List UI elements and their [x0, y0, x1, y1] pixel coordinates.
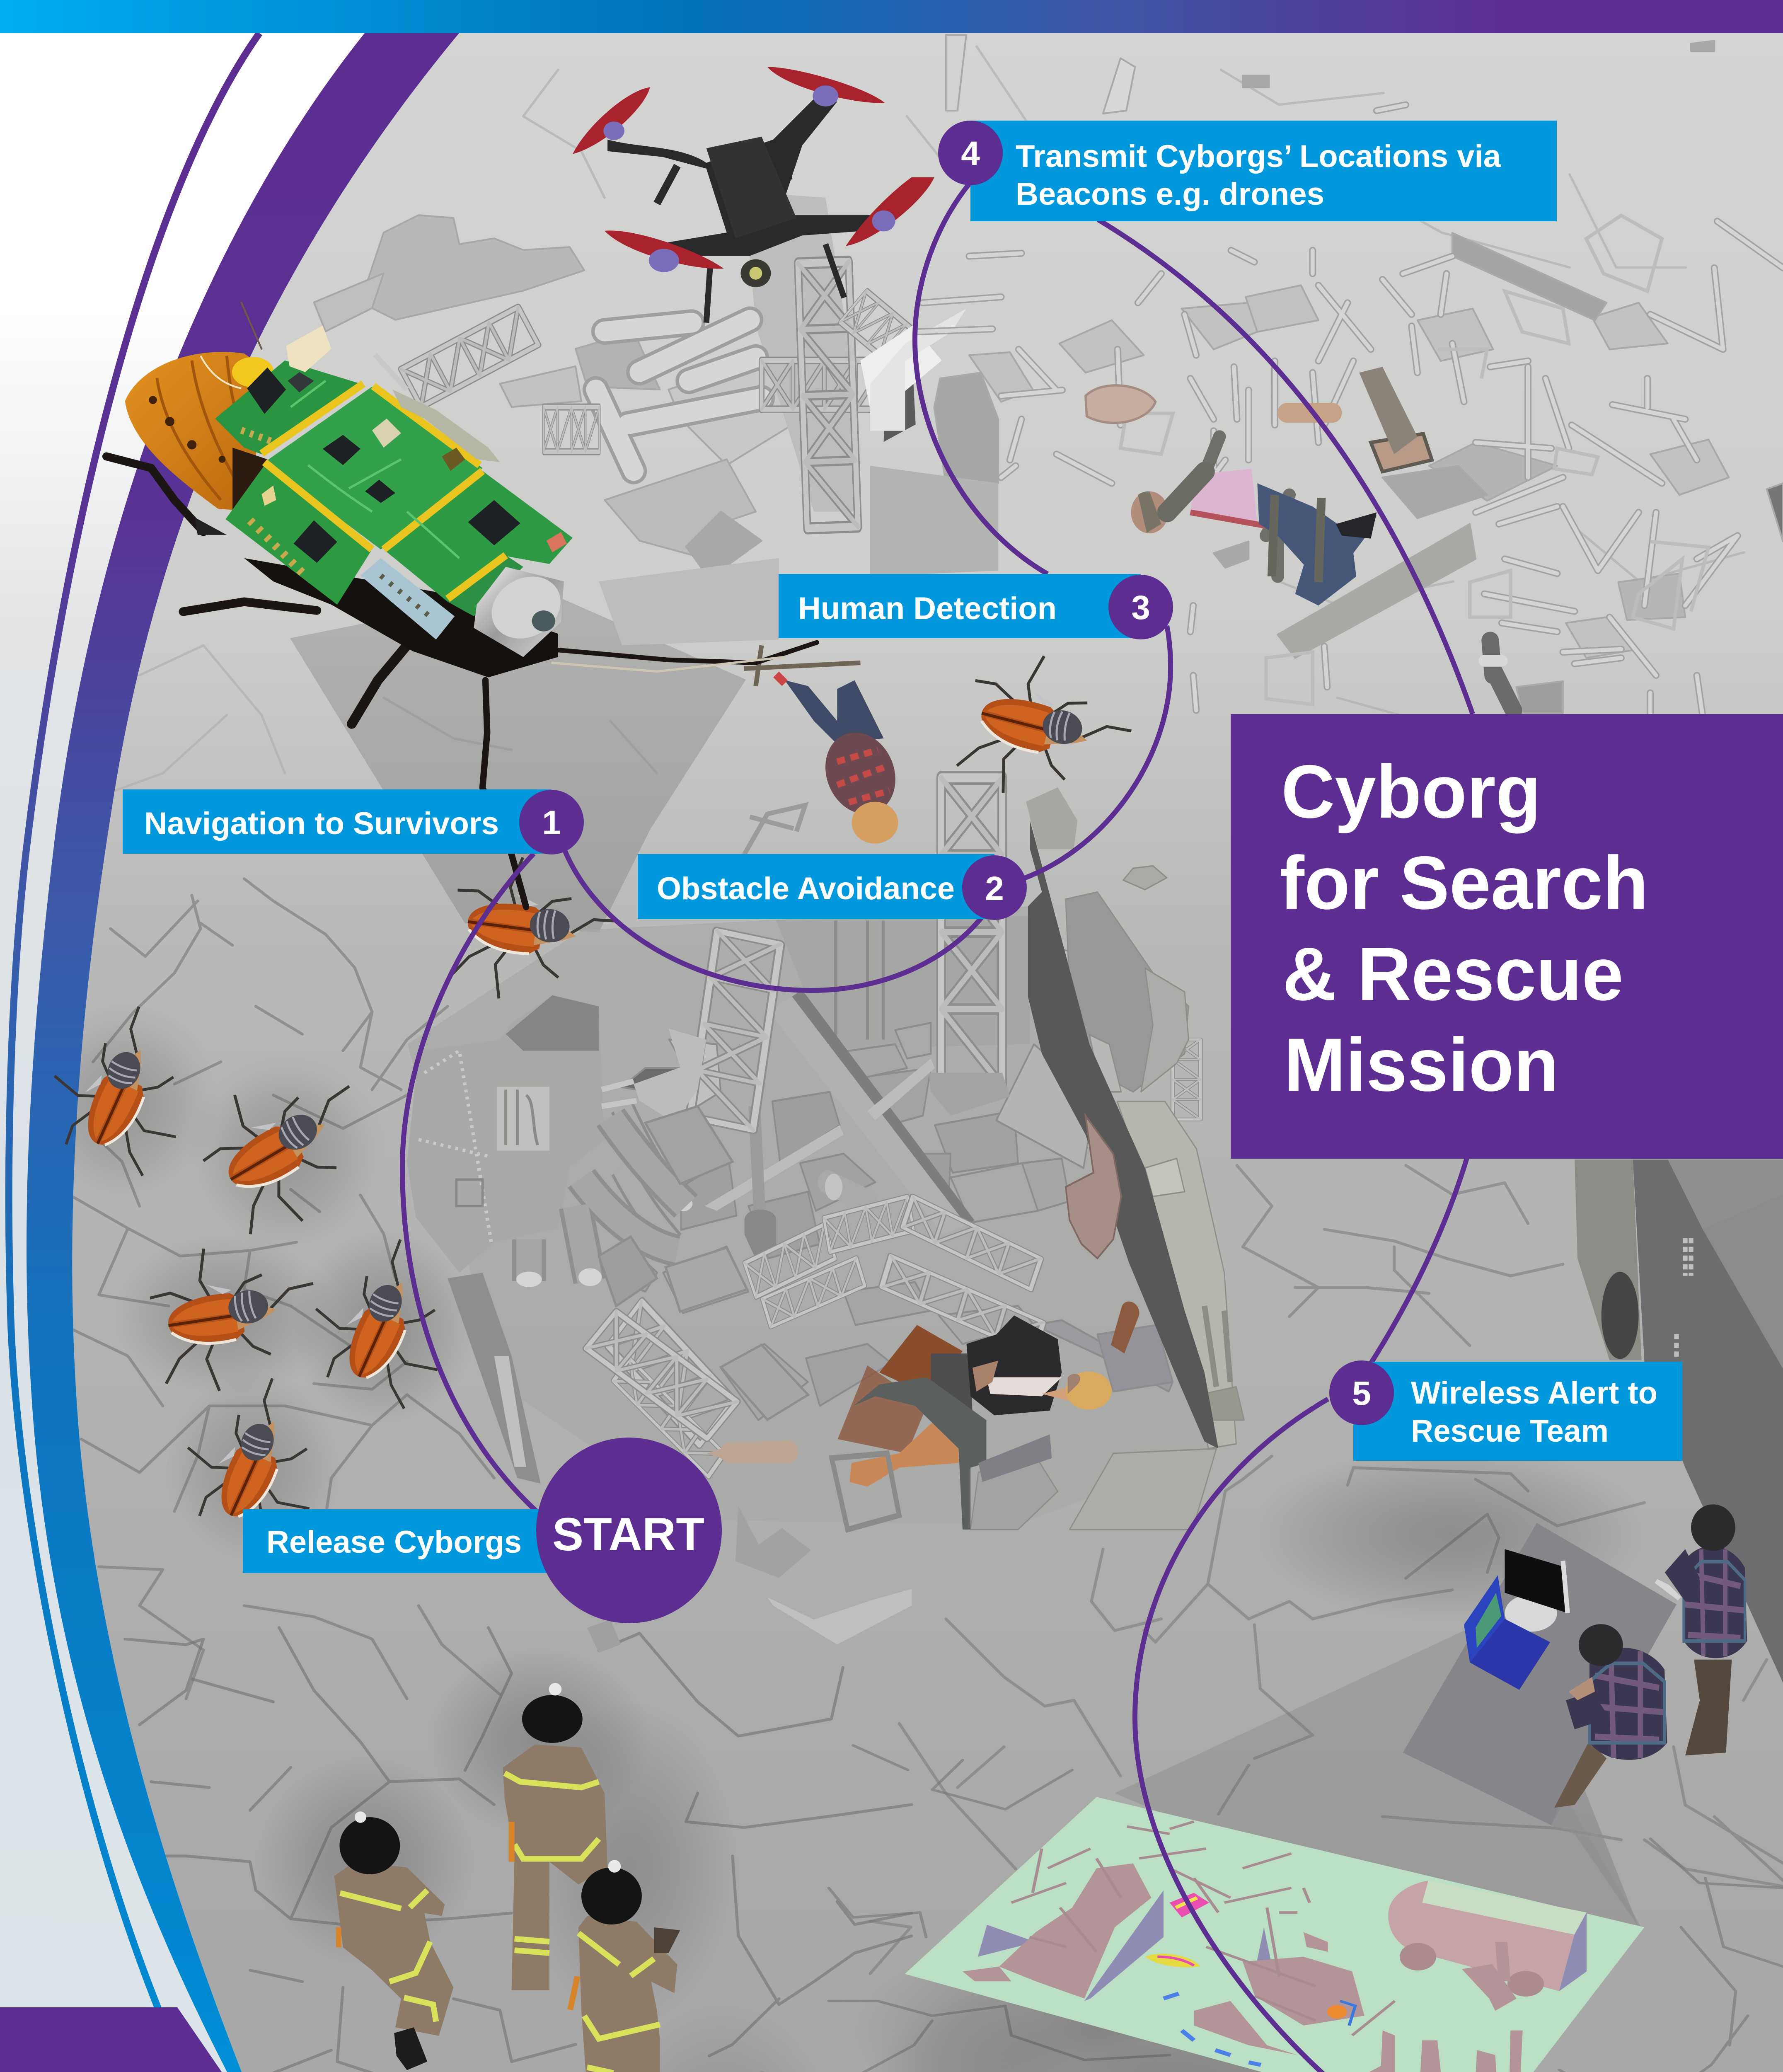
heap: pad: [407, 906, 1217, 1525]
cyborg insect 7: [949, 641, 1144, 821]
debris: sticks: [917, 105, 1783, 716]
insect: orange abdomen: [125, 352, 279, 512]
step: Release Cyborgs: Release Cyborgs: [266, 1525, 522, 1560]
cracks: left field: [70, 879, 500, 1699]
cyborg insect 4: [292, 1220, 481, 1418]
title panel: Mission: [1284, 1022, 1559, 1107]
cracks: lower left field: [122, 1628, 912, 2072]
scene: mobile unit truck: [1575, 1159, 1783, 1683]
mission path: Navigation to Obstacle Avoidance: [564, 850, 986, 990]
step 5: Wireless Alert to Rescue Team: [1329, 1360, 1682, 1461]
step: Release Cyborgs: START: [552, 1508, 704, 1560]
rubble: pipes: [596, 320, 762, 471]
display monitor: [1505, 1595, 1557, 1631]
rubble: dark remnant: [884, 349, 916, 442]
debris: bollard: [1484, 641, 1514, 710]
step 5: Wireless Alert to Rescue Team: Wireless Alert to: [1411, 1375, 1657, 1411]
step 1: Navigation to Survivors: 1: [542, 804, 561, 842]
debris: slabs: [870, 35, 1783, 713]
hull: slabs: [599, 1106, 808, 1420]
debris: remains: [1359, 367, 1418, 454]
swoosh: thick gradient band: [27, 33, 459, 2072]
step 5: Wireless Alert to Rescue Team: 5: [1352, 1375, 1371, 1412]
cyborg swarm: [30, 641, 1144, 1557]
cyborg insect 2: [183, 1043, 396, 1249]
map sheet: [905, 1797, 1644, 2072]
cyborg insect 6: [443, 849, 625, 1014]
mission path: Obstacle Avoidance to Human Detection: [1023, 626, 1171, 879]
title panel: Cyborg: [1281, 749, 1541, 834]
cracks: lower right field: [829, 1745, 1783, 2072]
survivor map: [905, 1797, 1644, 2072]
map: truck model: [1388, 1881, 1587, 1997]
purple corner block: [0, 2007, 424, 2072]
standing operator: [1656, 1504, 1747, 1755]
hull: long strip: [448, 1273, 541, 1484]
board: thermal sensor can: [474, 567, 564, 657]
debris: copper tank: [1278, 403, 1342, 423]
step 4: Transmit Cyborgs' Locations: Beacons e.g. drones: [1016, 177, 1324, 212]
board: solder pads: [250, 520, 305, 576]
cyborg insect 5: [164, 1358, 353, 1557]
firefighter 3: [567, 1860, 680, 2072]
projection cone from cockroach: [290, 588, 746, 932]
firefighter 2: [334, 1811, 453, 2070]
step 2: Obstacle Avoidance: 2: [985, 870, 1004, 908]
step 3: Human Detection: 3: [1131, 589, 1150, 627]
step 4: Transmit Cyborgs' Locations: Transmit Cyborgs’ Locations via: [1016, 139, 1501, 174]
firefighter 1: [503, 1683, 607, 1990]
mission path: Release to Navigation: [402, 854, 538, 1513]
step 3: Human Detection: Human Detection: [798, 591, 1057, 626]
map: rubble footprint: [963, 1863, 1364, 2055]
hull: pipes: [529, 1117, 686, 1281]
seated operator: [1554, 1624, 1667, 1808]
heap: column with foot: [755, 1106, 760, 1211]
debris: monitor frame: [1371, 434, 1432, 472]
survivor: trapped woman: [832, 1315, 1112, 1530]
step 1: Navigation to Survivors: Navigation to Survivors: [144, 806, 499, 841]
heap: base block: [929, 1073, 1010, 1116]
step 2: Obstacle Avoidance: [638, 854, 1027, 920]
photo: instrumented cockroach with sensor board: [106, 303, 817, 907]
cyborg insect 1: [30, 987, 219, 1185]
map: people models: [1361, 1942, 1523, 2072]
heap: dark collapsed wall: [1028, 821, 1218, 1449]
cracks: right mid field: [870, 1165, 1783, 1973]
cyborg insect 3: [144, 1234, 326, 1399]
projection cone from table to map: [1115, 1631, 1641, 1927]
firefighter team: [334, 1683, 814, 2072]
step 5: Wireless Alert to Rescue Team: Rescue Team: [1411, 1414, 1609, 1449]
heap: gas cylinder: [707, 1440, 798, 1463]
mission path: Human Detection to Transmit: [915, 182, 1048, 574]
icon: drone: [573, 67, 934, 323]
title panel: & Rescue: [1282, 932, 1623, 1016]
step 3: Human Detection: [779, 574, 1173, 639]
heap: slabs: [622, 1023, 1173, 1420]
mission path: Transmit to Wireless Alert: [1098, 220, 1473, 1365]
heap: torn fabric: [1066, 1116, 1121, 1259]
step 2: Obstacle Avoidance: Obstacle Avoidance: [657, 871, 955, 906]
left edge backdrop: [0, 0, 459, 2072]
title panel: for Search: [1280, 840, 1648, 925]
heap: diagonal beam: [768, 997, 967, 1234]
laptop: [1464, 1575, 1505, 1663]
rubble: trusses: [401, 307, 538, 407]
title panel: [1231, 714, 1783, 1159]
insect: legs and antennae: [106, 303, 817, 907]
upper rubble field: [314, 192, 942, 645]
swoosh: thin arc: [9, 33, 259, 2012]
cracks: upper faint: [99, 46, 1744, 849]
heap: right stacked blocks: [970, 866, 1244, 1530]
step 4: Transmit Cyborgs' Locations: [938, 121, 1557, 221]
board: green sensor sections: [215, 361, 573, 616]
central rubble heap: [407, 778, 1244, 1530]
step 4: Transmit Cyborgs' Locations: 4: [961, 135, 980, 172]
table top: [1403, 1523, 1677, 1825]
rubble: walls and slabs: [314, 192, 860, 645]
heap: trusses: [690, 931, 780, 1130]
scene: rescue command table: [1403, 1504, 1747, 1927]
survivor: man on back: [1131, 469, 1377, 605]
machine hull on heap left: [407, 995, 912, 1653]
mission path: Wireless Alert to Map Out: [1135, 1399, 1380, 2072]
heap: pipes: [622, 1106, 681, 1244]
board: white connector: [286, 326, 331, 372]
top gradient bar: [0, 0, 1783, 33]
step: Release Cyborgs: [243, 1438, 722, 1623]
map: wall footprint: [1084, 1890, 1164, 2001]
insect: dark underbody: [244, 558, 558, 677]
board: pin header: [360, 558, 455, 639]
board: gold connector strips: [261, 384, 506, 599]
debris: frames: [1120, 215, 1708, 704]
step 1: Navigation to Survivors: [123, 789, 584, 854]
ground halos: dark smudges under figures: [29, 1003, 1649, 2072]
board: chips: [247, 368, 520, 563]
survivor: woman near human detection: [744, 645, 907, 854]
debris: ring: [1086, 385, 1155, 423]
heap: back wall: [776, 916, 1030, 1049]
insect: shadow: [195, 518, 227, 535]
hull: rubble chunks: [735, 1506, 811, 1578]
map: thermal hot spots: [1145, 1893, 1355, 2065]
scattered debris upper right: [870, 35, 1783, 716]
heap: rusty tank: [1111, 1302, 1139, 1353]
